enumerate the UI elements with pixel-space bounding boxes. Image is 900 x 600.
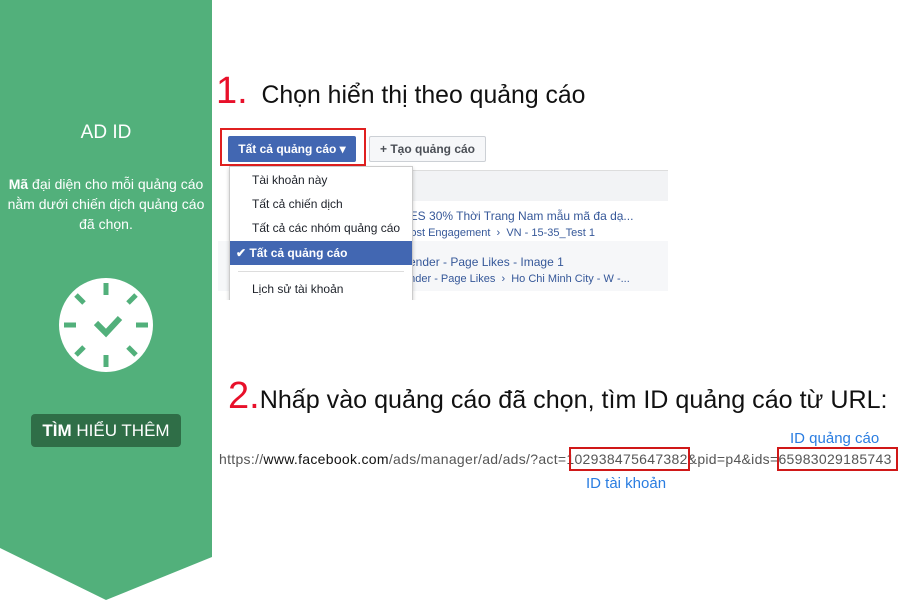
sidebar panel: [0, 0, 212, 600]
screenshot: ads manager dropdown: [218, 128, 668, 300]
dropdown menu: Tất cả chiến dịch: [252, 197, 343, 211]
dropdown menu: Tài khoản này: [252, 173, 327, 187]
label: account id: ID tài khoản: [586, 475, 666, 492]
dropdown menu: ✔ Tất cả quảng cáo: [236, 246, 347, 260]
ad rows text: LES 30% Thời Trang Nam mẫu mã đa dạ...: [403, 209, 633, 223]
step 1 heading: 1. Chọn hiển thị theo quảng cáo: [216, 70, 585, 112]
dropdown menu: Lịch sử tài khoản: [252, 282, 343, 296]
icon: clock: [59, 278, 153, 372]
dropdown menu: Tất cả các nhóm quảng cáo: [252, 221, 400, 235]
sidebar description: Mã đại diện cho mỗi quảng cáo nằm dưới chiến dịch quảng cáo đã chọn.: [8, 176, 204, 232]
label: ad id: ID quảng cáo: [790, 430, 879, 447]
highlight: ad id: [777, 447, 898, 471]
sidebar heading: AD ID: [81, 122, 131, 143]
ad rows text: [403, 209, 633, 239]
screenshot: ads manager dropdown: Tất cả quảng cáo ▾: [238, 142, 346, 156]
screenshot: ads manager dropdown: vender - Page Likes - Image 1: [403, 255, 564, 269]
create ad button: [369, 136, 486, 162]
step 2 heading: 2.Nhấp vào quảng cáo đã chọn, tìm ID quảng cáo từ URL:: [228, 375, 888, 417]
button: learn more: [31, 414, 181, 447]
selected button with red highlight: [220, 128, 366, 166]
create ad button: + Tạo quảng cáo: [380, 142, 475, 156]
button: learn more: TÌM HIỂU THÊM: [42, 421, 170, 440]
dropdown menu: [229, 166, 413, 308]
screenshot: ads manager dropdown: ender - Page Likes › Ho Chi Minh City - W -...: [403, 273, 630, 285]
url text: https://www.facebook.com/ads/manager/ad/ads/?act=102938475647382&pid=p4&ids=65983029185743: [219, 451, 892, 467]
highlight: account id: [569, 447, 690, 471]
ad rows text: Post Engagement › VN - 15-35_Test 1: [403, 227, 595, 239]
